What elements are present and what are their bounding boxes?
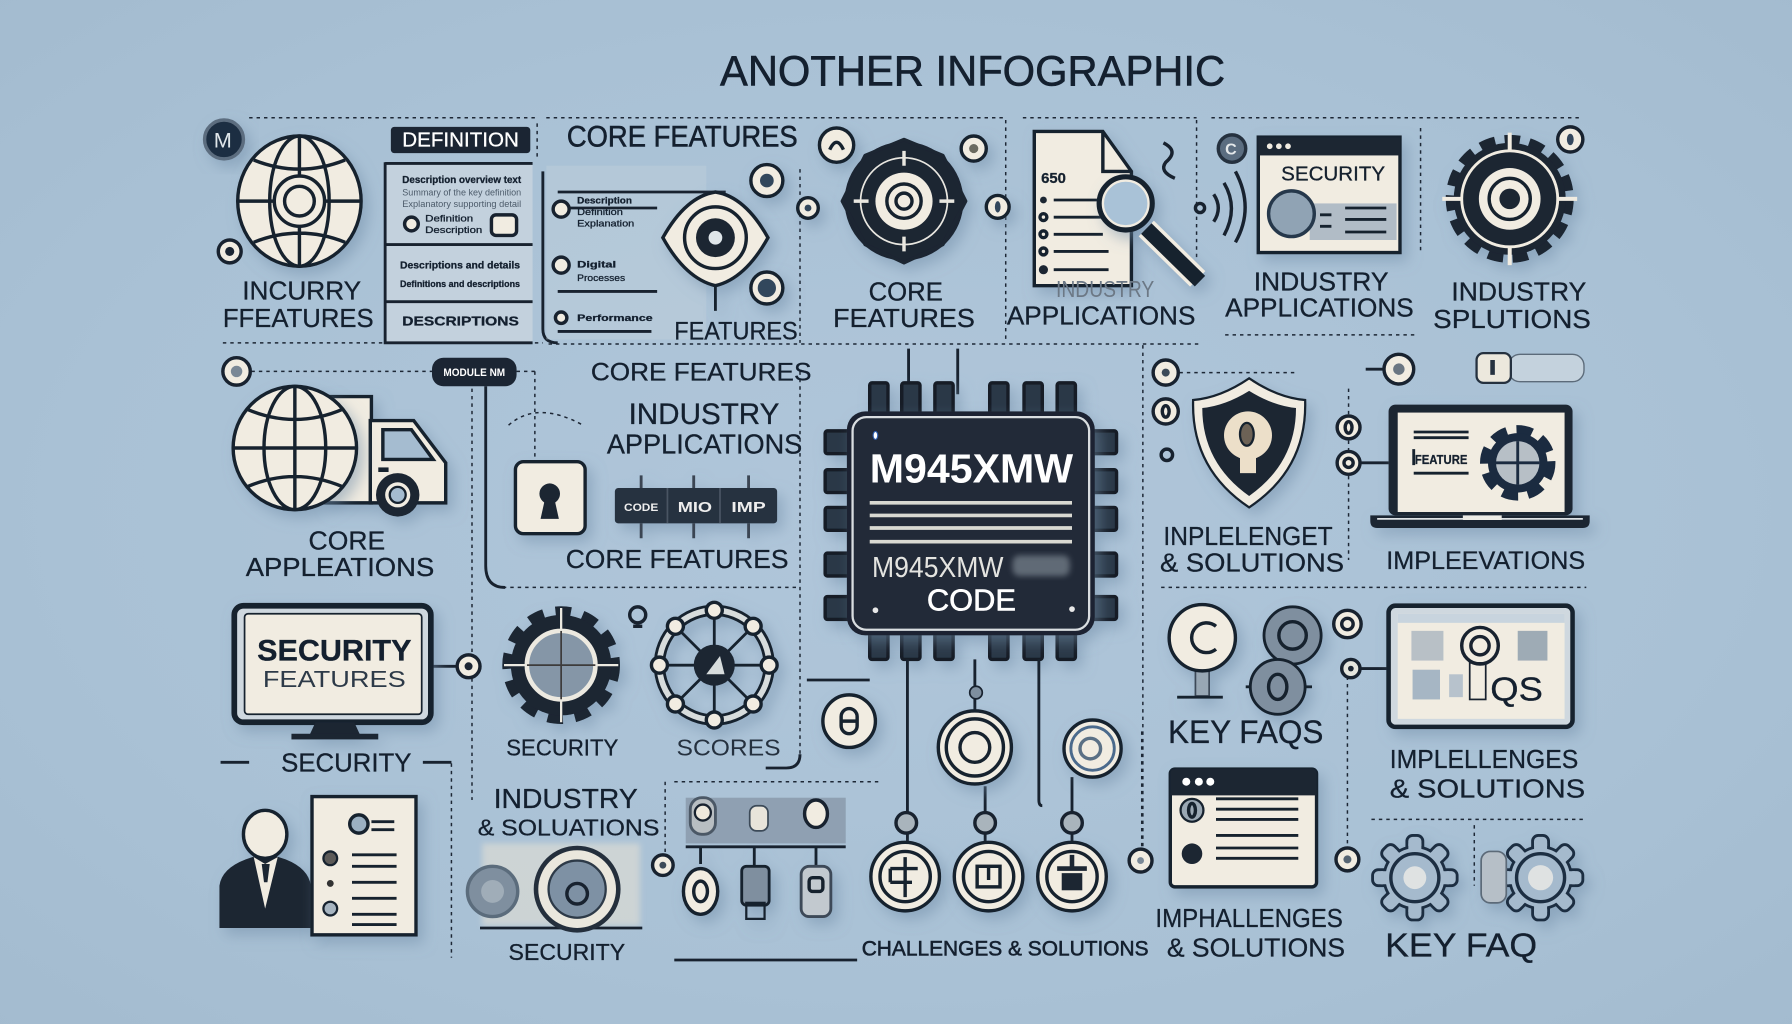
label: core features: FEATURES <box>833 303 975 333</box>
panel: key faqs <box>1168 605 1323 750</box>
label: industry applications <box>1007 276 1195 331</box>
label: IMPLELLENGES <box>1390 744 1578 774</box>
monitor text <box>257 635 412 692</box>
icons: badges <box>1337 354 1414 474</box>
label <box>1160 521 1344 577</box>
label: core applications: CORE <box>309 526 385 556</box>
feature rows: Description <box>577 195 632 205</box>
label: industry solutions <box>1433 277 1591 334</box>
label: security: SECURITY <box>509 939 625 965</box>
chip body <box>847 411 1095 635</box>
icon: switch bar <box>615 475 777 538</box>
panel: security window <box>1195 135 1414 323</box>
chip title: M945XMW <box>870 445 1073 491</box>
label: industry applications: APPLICATIONS <box>1225 293 1414 323</box>
label: core features <box>833 277 975 333</box>
chip text lines <box>870 503 1072 542</box>
icon: small end dot <box>1129 849 1152 872</box>
heading: INDUSTRY <box>494 783 638 814</box>
heading: industry applications <box>607 398 802 460</box>
monitor text: FEATURES <box>263 666 406 692</box>
icon: M badge <box>205 120 243 159</box>
heading: industry applications: APPLICATIONS <box>607 429 802 460</box>
panel: inquiry features <box>205 120 374 333</box>
icon: person <box>219 810 311 928</box>
heading <box>478 783 659 840</box>
icon: document <box>1034 131 1131 286</box>
icon: ring light <box>1064 720 1121 777</box>
icon: globe <box>233 386 357 510</box>
icon: key circle <box>1169 605 1235 697</box>
heading: industry applications: INDUSTRY <box>629 398 780 431</box>
icon: small badge <box>218 240 241 263</box>
icon: sound waves <box>1195 171 1245 242</box>
icon: switch bar: IMP <box>731 500 766 516</box>
heading: incurry features: INCURRY <box>242 275 361 305</box>
feature rows: Definition <box>577 207 623 217</box>
tag icons lower <box>683 847 831 919</box>
divider <box>686 846 846 848</box>
definition rows: Definitions and descriptions <box>400 279 520 289</box>
label: IMPHALLENGES <box>1155 903 1343 933</box>
icon: badge <box>223 358 250 385</box>
label: industry applications <box>1225 266 1414 323</box>
panel: hanging tags <box>683 798 846 919</box>
label: IMPLEEVATIONS <box>1386 547 1585 575</box>
icon: dark gear <box>842 139 966 263</box>
tag: definition: DEFINITION <box>402 128 519 151</box>
bar <box>686 798 846 843</box>
tag icons upper <box>690 798 827 834</box>
label: features: FEATURES <box>674 317 798 345</box>
label: & SOLUTIONS <box>1160 547 1344 577</box>
icon: laptop <box>1370 405 1590 528</box>
panel: security gears <box>504 602 781 760</box>
icon: badge: C <box>1225 141 1237 158</box>
panel: core features <box>546 120 818 345</box>
icon: dark target gear <box>504 608 618 722</box>
definition rows: DESCRIPTIONS <box>402 315 519 329</box>
card with dial <box>467 843 642 930</box>
label: industry applications: INDUSTRY <box>1254 266 1389 296</box>
icon: keyhole lock <box>515 462 585 534</box>
icon: connector dot <box>1336 848 1359 871</box>
feature rows: Digital <box>577 259 616 269</box>
panel: faq tablet <box>1334 606 1585 804</box>
icon: connector dot <box>457 655 480 678</box>
definition rows <box>385 162 533 343</box>
label: core applications: APPLEATIONS <box>246 552 434 582</box>
icon: gear left <box>1373 835 1457 920</box>
icon: connector dot <box>653 855 673 875</box>
panel: industry and solutions <box>467 783 673 965</box>
panel: core applications <box>223 358 517 582</box>
label: core features: CORE FEATURES <box>566 544 789 574</box>
icon: large gear <box>1442 133 1577 265</box>
panel: key faq gears <box>1373 835 1583 965</box>
icon: report <box>312 797 416 935</box>
label: industry applications: APPLICATIONS <box>1007 301 1195 331</box>
heading: core features: CORE FEATURES <box>567 120 798 153</box>
icon: switch bar: MIO <box>678 500 712 516</box>
tag: application <box>432 358 517 386</box>
monitor text: SECURITY <box>257 635 412 668</box>
label: & SOLUTIONS <box>1390 774 1585 804</box>
label: industry applications: INDUSTRY <box>1056 276 1154 302</box>
definition rows: Explanatory supporting detail <box>402 199 521 209</box>
chip blur block <box>1013 555 1070 576</box>
icon: laptop gear <box>1487 432 1549 494</box>
label: core features: CORE FEATURES <box>591 359 811 387</box>
panel: core features gear <box>819 128 1009 333</box>
chip pins <box>825 383 1117 659</box>
icon: pill tag <box>1477 353 1584 383</box>
icon: gear right <box>1481 835 1583 920</box>
icon: switch bar: CODE <box>624 502 659 514</box>
definition rows: Descriptions and details <box>400 261 520 272</box>
chip marks <box>873 431 1075 613</box>
icon: small connector dot <box>970 686 982 699</box>
labels: security and scores <box>506 734 781 760</box>
definition rows: Summary of the key definition <box>402 187 521 197</box>
heading: incurry features <box>223 275 374 333</box>
title: ANOTHER INFOGRAPHIC <box>720 48 1225 95</box>
heading: incurry features: FFEATURES <box>223 303 374 333</box>
feature rows: Explanation <box>577 218 634 228</box>
icon: squiggle <box>1163 143 1175 178</box>
window: security <box>1258 137 1400 253</box>
tablet content: QS <box>1490 672 1543 709</box>
tag: application: MODULE NM <box>443 367 505 379</box>
chip subtitle: M945XMW <box>872 552 1003 584</box>
connectors <box>907 659 1072 869</box>
icon: monitor <box>234 606 431 739</box>
panel: browser solutions <box>1155 769 1359 963</box>
feature rows: Performance <box>577 313 653 323</box>
tablet content <box>1411 627 1547 709</box>
window: security: SECURITY <box>1281 163 1385 186</box>
panel: industry solutions <box>1433 127 1591 334</box>
heading: challenges and solutions: CHALLENGES & SOLUTIONS <box>862 937 1149 960</box>
label: core applications <box>246 526 434 582</box>
icons: connector dots <box>1334 610 1361 678</box>
label <box>1390 744 1585 804</box>
heading: & SOLUATIONS <box>478 814 659 840</box>
labels: security and scores: SCORES <box>677 734 781 760</box>
icon: laptop: FEATURE <box>1415 453 1467 467</box>
definition rows: Definition <box>425 214 473 224</box>
icon: solution badge 3 <box>1038 842 1106 911</box>
label: industry solutions: SPLUTIONS <box>1433 304 1591 334</box>
icon: gray dials <box>1246 607 1321 714</box>
panel: laptop implementation <box>1337 353 1590 575</box>
icon: delivery truck <box>326 397 446 517</box>
icon: pin <box>630 607 646 626</box>
icon: shield <box>1193 378 1305 507</box>
icon: badge <box>1558 127 1583 152</box>
feature rows <box>546 166 726 339</box>
icon: globe <box>238 136 361 266</box>
icon: eye dial <box>663 192 768 311</box>
label: INPLELENGET <box>1163 521 1333 551</box>
icon: ring <box>938 711 1011 784</box>
panel: shield implementation <box>1153 360 1344 577</box>
icon: browser window <box>1170 769 1317 887</box>
panel: industry applications document <box>1007 131 1200 331</box>
label: & SOLUTIONS <box>1167 933 1345 963</box>
label: KEY FAQS <box>1168 714 1323 750</box>
label: industry solutions: INDUSTRY <box>1451 277 1586 307</box>
icon: node wheel <box>651 602 777 728</box>
arrows <box>221 761 451 764</box>
panel: security monitor <box>221 606 480 777</box>
definition rows: Description overview text <box>402 175 522 186</box>
chip code label: CODE <box>927 582 1016 617</box>
icons: node dots <box>896 813 1082 833</box>
panel: definition <box>385 127 533 343</box>
connector <box>251 370 432 372</box>
panel: industry applications lock <box>515 359 811 574</box>
panel: person and document <box>219 797 416 935</box>
icon: badge 8 <box>823 695 875 747</box>
labels: security and scores: SECURITY <box>506 734 618 760</box>
icon: document: 650 <box>1041 171 1066 187</box>
label: core features: CORE <box>869 277 943 307</box>
icon: badge <box>1218 135 1246 162</box>
panel: central chip <box>825 383 1117 659</box>
icons: badges <box>1153 360 1178 461</box>
feature rows: Processes <box>577 273 626 283</box>
icon: tablet <box>1389 606 1573 727</box>
label: security: SECURITY <box>281 747 411 777</box>
icon: solution badge 2 <box>954 842 1023 911</box>
icon: badges <box>819 128 1009 218</box>
label: KEY FAQ <box>1385 928 1537 965</box>
icons: badges <box>751 165 818 304</box>
panel: challenges and solutions <box>823 659 1152 960</box>
icon: M badge: M <box>214 127 232 152</box>
icon: magnifier <box>1099 177 1200 281</box>
definition rows: Description <box>425 225 482 235</box>
icon: solution badge 1 <box>871 842 939 911</box>
label <box>1155 903 1345 963</box>
